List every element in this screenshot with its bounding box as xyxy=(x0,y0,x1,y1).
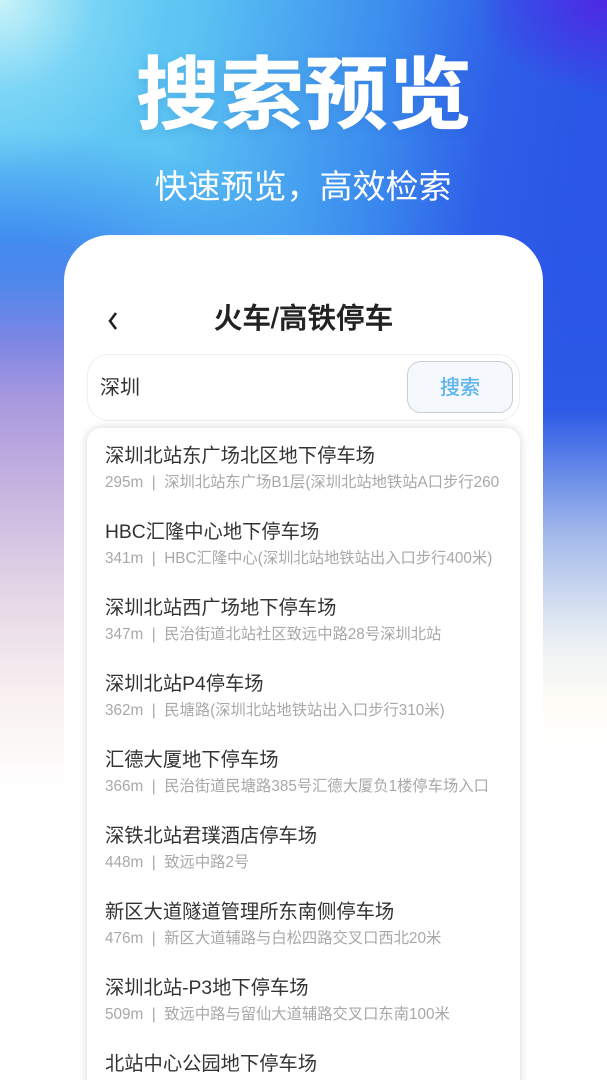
background: left fade xyxy=(0,230,250,1080)
result 8: 509m | 致远中路与留仙大道辅路交叉口东南100米 xyxy=(105,1006,450,1023)
result 3: 347m | 民治街道北站社区致远中路28号深圳北站 xyxy=(105,626,441,643)
result 1: 295m | 深圳北站东广场B1层(深圳北站地铁站A口步行260 xyxy=(105,474,499,491)
result 2 xyxy=(105,521,492,567)
page heading: 火车/高铁停车 xyxy=(214,303,393,335)
result 5: 366m | 民治街道民塘路385号汇德大厦负1楼停车场入口 xyxy=(105,778,489,795)
icon: back chevron xyxy=(108,312,117,330)
result 1 xyxy=(105,445,499,491)
search button: 搜索 xyxy=(440,377,480,399)
title: 搜索预览 xyxy=(136,50,472,140)
result 3: 深圳北站西广场地下停车场 xyxy=(105,598,336,619)
result 4 xyxy=(105,673,445,719)
result 6: 448m | 致远中路2号 xyxy=(105,854,249,871)
results list panel xyxy=(87,428,520,1080)
result 8: 深圳北站-P3地下停车场 xyxy=(105,978,309,999)
result 1: 深圳北站东广场北区地下停车场 xyxy=(105,446,375,467)
result 7: 新区大道隧道管理所东南侧停车场 xyxy=(105,902,394,923)
result 3 xyxy=(105,597,441,643)
result 5: 汇德大厦地下停车场 xyxy=(105,750,279,771)
background: right fade xyxy=(357,230,607,1080)
result 4: 362m | 民塘路(深圳北站地铁站出入口步行310米) xyxy=(105,702,445,719)
search bar xyxy=(87,354,520,421)
result 8 xyxy=(105,977,450,1023)
result 7: 476m | 新区大道辅路与白松四路交叉口西北20米 xyxy=(105,930,441,947)
subtitle: 快速预览，高效检索 xyxy=(154,168,452,205)
result 2: HBC汇隆中心地下停车场 xyxy=(105,522,319,543)
result 6: 深铁北站君璞酒店停车场 xyxy=(105,826,317,847)
result 6 xyxy=(105,825,317,871)
search input text: 深圳 xyxy=(100,377,140,399)
result 9: 北站中心公园地下停车场 xyxy=(105,1054,317,1075)
panel: phone card xyxy=(64,235,543,1080)
result 2: 341m | HBC汇隆中心(深圳北站地铁站出入口步行400米) xyxy=(105,550,492,567)
search button xyxy=(407,361,513,413)
result 4: 深圳北站P4停车场 xyxy=(105,674,264,695)
result 5 xyxy=(105,749,489,795)
result 7 xyxy=(105,901,441,947)
